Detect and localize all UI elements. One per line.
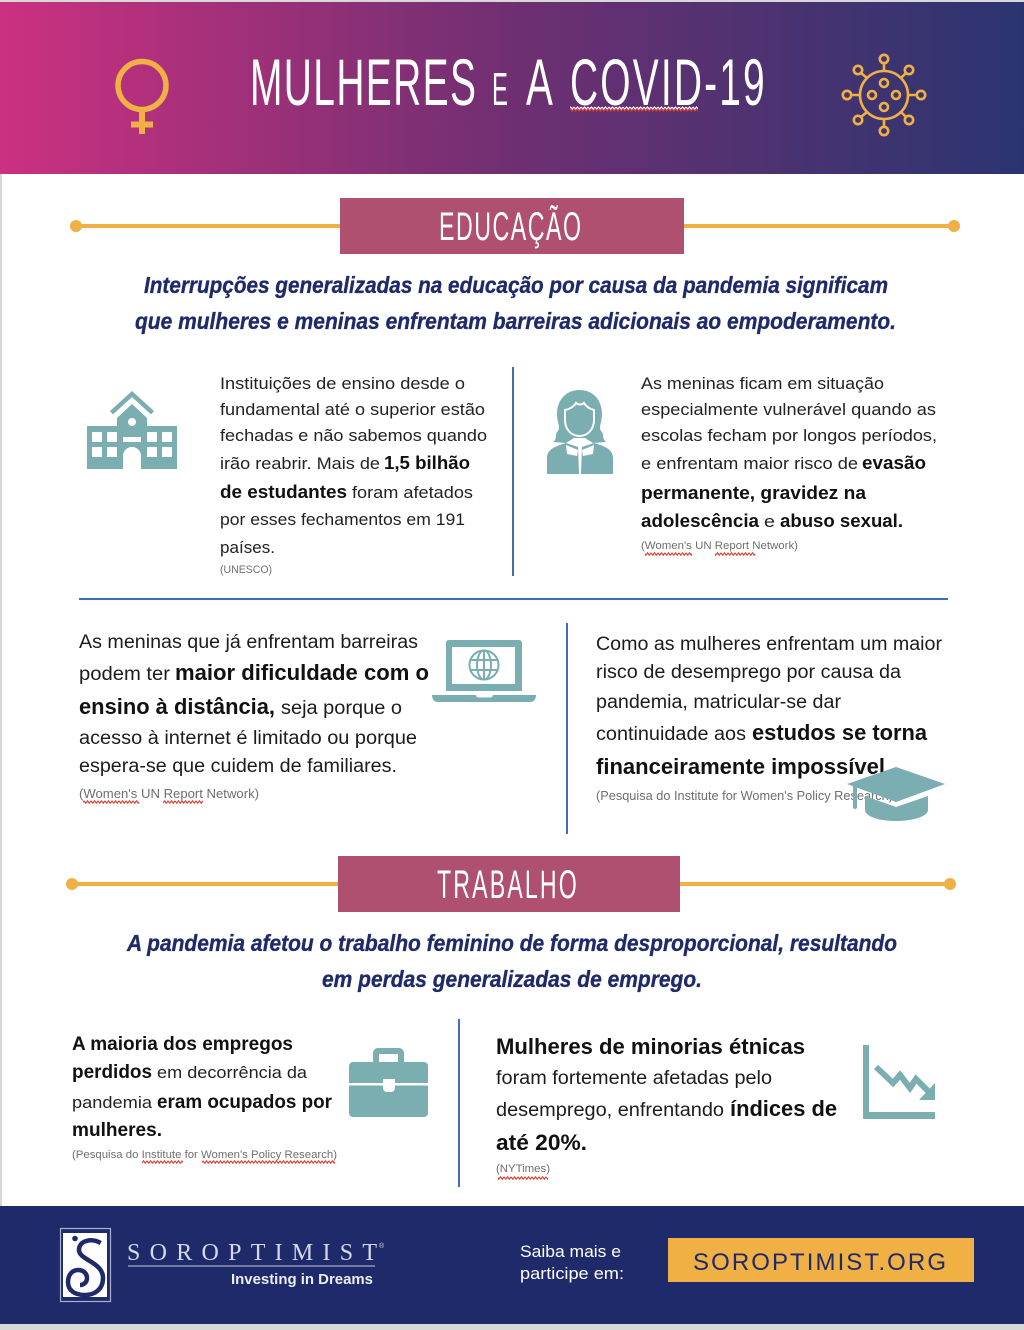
text block: remote learning: (Women's UN Report Network) [79, 786, 259, 801]
work intro text [126, 930, 897, 992]
work intro text: A pandemia afetou o trabalho feminino de forma desproporcional, resultando [126, 930, 897, 956]
text block: unemployment and studies: financeiramente impossível [596, 754, 885, 779]
text block: ethnic minorities: Mulheres de minorias étnicas [496, 1034, 805, 1059]
text block: vulnerable girls: adolescência [641, 511, 760, 531]
text block: education institutions: por esses fechamentos em 191 [220, 510, 465, 529]
text block: education institutions: (UNESCO) [220, 564, 272, 576]
section heading: Educação: EDUCAÇÃO [439, 203, 581, 249]
text block: remote learning: maior dificuldade com o [175, 660, 429, 685]
text block: remote learning: espera-se que cuidem de familiares. [79, 756, 397, 777]
divider [79, 367, 948, 1187]
text block: ethnic minorities: (NYTimes) [496, 1163, 550, 1175]
text block: lost jobs: em decorrência da [157, 1063, 308, 1082]
text block: lost jobs: eram ocupados por [157, 1092, 333, 1113]
text block: education institutions: foram afetados [352, 483, 473, 502]
icon: falling chart [863, 1045, 935, 1119]
text block: ethnic minorities: índices de [730, 1096, 837, 1121]
text block: lost jobs: A maioria dos empregos [72, 1034, 293, 1055]
logo wordmark: Investing in Dreams [231, 1272, 373, 1288]
text block: remote learning: acesso à internet é limitado ou porque [79, 728, 417, 749]
icon: virus [843, 55, 925, 135]
education intro text: que mulheres e meninas enfrentam barreiras adicionais ao empoderamento. [135, 308, 896, 334]
icon: girl [547, 390, 613, 474]
text block: lost jobs [72, 1034, 337, 1164]
text block: vulnerable girls: (Women's UN Report Network) [641, 540, 798, 552]
text block: remote learning: As meninas que já enfrentam barreiras [79, 632, 418, 653]
logo mark [60, 1228, 110, 1302]
title: E [492, 64, 508, 115]
website button: SOROPTIMIST.ORG [693, 1249, 946, 1276]
work intro text: em perdas generalizadas de emprego. [322, 966, 702, 992]
header banner [0, 2, 1024, 174]
icon: female symbol [118, 62, 166, 134]
text block: unemployment and studies: risco de desemprego por causa da [596, 662, 901, 683]
logo wordmark: ® [379, 1242, 385, 1250]
text block: education institutions: irão reabrir. Mais de [220, 454, 380, 473]
text block: unemployment and studies: Como as mulheres enfrentam um maior [596, 634, 943, 655]
text block: unemployment and studies: (Pesquisa do Institute for Women's Policy Research) [596, 788, 893, 803]
icon: laptop with globe [432, 640, 536, 702]
text block: education institutions: países. [220, 538, 275, 557]
text block: vulnerable girls: especialmente vulnerável quando as [641, 400, 936, 419]
title: COVID-19 [570, 47, 765, 120]
education intro text [135, 272, 896, 334]
text block: ethnic minorities: até 20%. [496, 1130, 587, 1155]
call to action text [520, 1243, 624, 1283]
icon: briefcase [349, 1048, 428, 1117]
text block: education institutions: 1,5 bilhão [384, 453, 470, 473]
text block: vulnerable girls [641, 374, 937, 556]
text block: vulnerable girls: evasão [862, 453, 926, 473]
text block: unemployment and studies [596, 634, 943, 803]
website button [668, 1238, 974, 1282]
logo wordmark: SOROPTIMIST [127, 1240, 377, 1266]
footer [0, 1206, 1024, 1324]
text block: remote learning: podem ter [79, 664, 171, 685]
text block: education institutions: fechadas e não sabemos quando [220, 426, 487, 445]
text block: vulnerable girls: As meninas ficam em situação [641, 374, 884, 393]
text block: lost jobs: mulheres. [72, 1120, 162, 1141]
text block: unemployment and studies: estudos se torna [752, 720, 928, 745]
text block: lost jobs: (Pesquisa do Institute for Women's Policy Research) [72, 1149, 337, 1161]
text block: lost jobs: perdidos [72, 1062, 152, 1083]
text block: unemployment and studies: continuidade aos [596, 724, 746, 745]
text block: education institutions: de estudantes [220, 482, 347, 502]
text block: ethnic minorities: foram fortemente afetadas pelo [496, 1068, 772, 1089]
text block: vulnerable girls: permanente, gravidez na [641, 483, 867, 503]
text block: education institutions: fundamental até o superior estão [220, 400, 485, 419]
text block: lost jobs: pandemia [72, 1093, 153, 1112]
text block: education institutions: Instituições de ensino desde o [220, 374, 465, 393]
section heading: Educação [70, 198, 960, 254]
text block: ethnic minorities [496, 1034, 837, 1180]
text block: vulnerable girls: e enfrentam maior risco de [641, 454, 858, 473]
text block: education institutions [220, 374, 487, 576]
text block: remote learning: seja porque o [281, 698, 402, 719]
icon: graduation cap [847, 767, 945, 821]
title [250, 46, 765, 120]
title: MULHERES [250, 47, 476, 120]
text block: remote learning: ensino à distância, [79, 694, 275, 719]
education intro text: Interrupções generalizadas na educação por causa da pandemia significam [144, 272, 888, 298]
call to action text: participe em: [520, 1265, 624, 1283]
section heading: Trabalho: TRABALHO [437, 861, 577, 907]
section heading: Trabalho [66, 856, 956, 912]
text block: ethnic minorities: desemprego, enfrentando [496, 1100, 724, 1121]
logo wordmark [127, 1240, 385, 1288]
call to action text: Saiba mais e [520, 1243, 621, 1261]
text block: remote learning [79, 632, 429, 804]
title: A [526, 46, 553, 119]
icon: school [87, 391, 177, 469]
text block: unemployment and studies: pandemia, matricular-se dar [596, 692, 842, 713]
text block: vulnerable girls: abuso sexual. [780, 511, 903, 531]
text block: vulnerable girls: escolas fecham por longos períodos, [641, 426, 937, 445]
text block: vulnerable girls: e [764, 512, 775, 531]
